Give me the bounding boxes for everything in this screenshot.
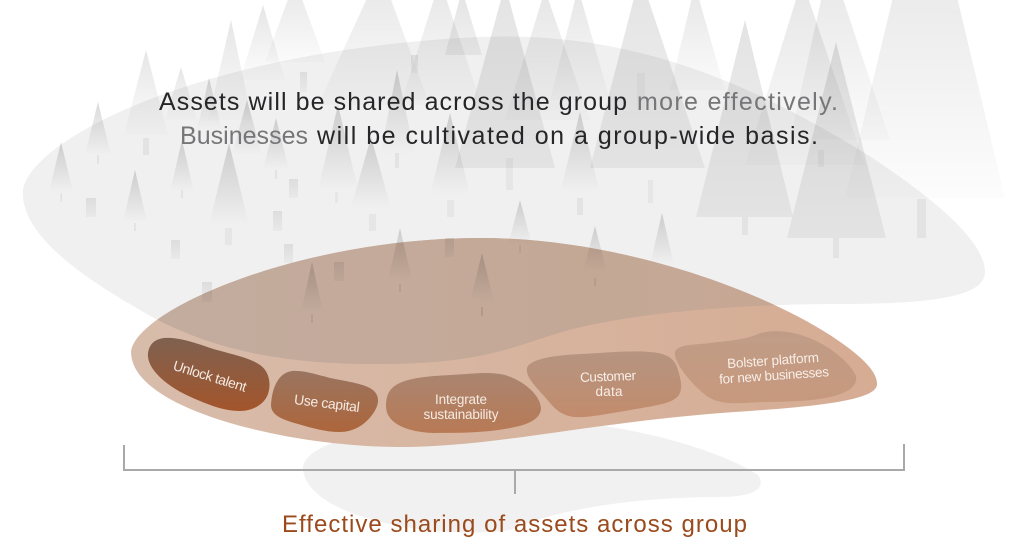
blob: large grey ground shape xyxy=(23,36,985,364)
chip: Integrate sustainability: Integrate xyxy=(435,392,487,407)
chip: Use capital: Use capital xyxy=(293,391,361,415)
chip: Customer data: data xyxy=(596,384,623,399)
headline: more effectively. xyxy=(637,88,838,116)
chip: Unlock talent: Unlock talent xyxy=(171,357,249,395)
chip: Customer data xyxy=(527,351,681,417)
blob: brown sharing platform xyxy=(131,238,877,447)
headline: will be cultivated on a group-wide basis. xyxy=(316,122,818,150)
headline xyxy=(159,88,838,150)
chip: Use capital xyxy=(271,371,378,432)
chip: Bolster platform for new businesses: Bolster platform xyxy=(727,350,819,371)
headline: Businesses xyxy=(180,122,308,150)
chip: Bolster platform for new businesses: for new businesses xyxy=(719,364,830,387)
forest of grey trees xyxy=(49,0,1005,323)
blob: lower grey ground shape xyxy=(303,418,761,532)
headline: Assets will be shared across the group xyxy=(159,88,627,116)
chip: Bolster platform for new businesses xyxy=(675,331,856,403)
bracket xyxy=(124,444,904,494)
chip: Unlock talent xyxy=(148,338,269,411)
chip: Customer data: Customer xyxy=(580,368,637,385)
chip: Integrate sustainability xyxy=(386,373,541,433)
chip: Integrate sustainability: sustainability xyxy=(424,407,499,422)
caption: effective sharing: Effective sharing of assets across group xyxy=(282,511,747,538)
